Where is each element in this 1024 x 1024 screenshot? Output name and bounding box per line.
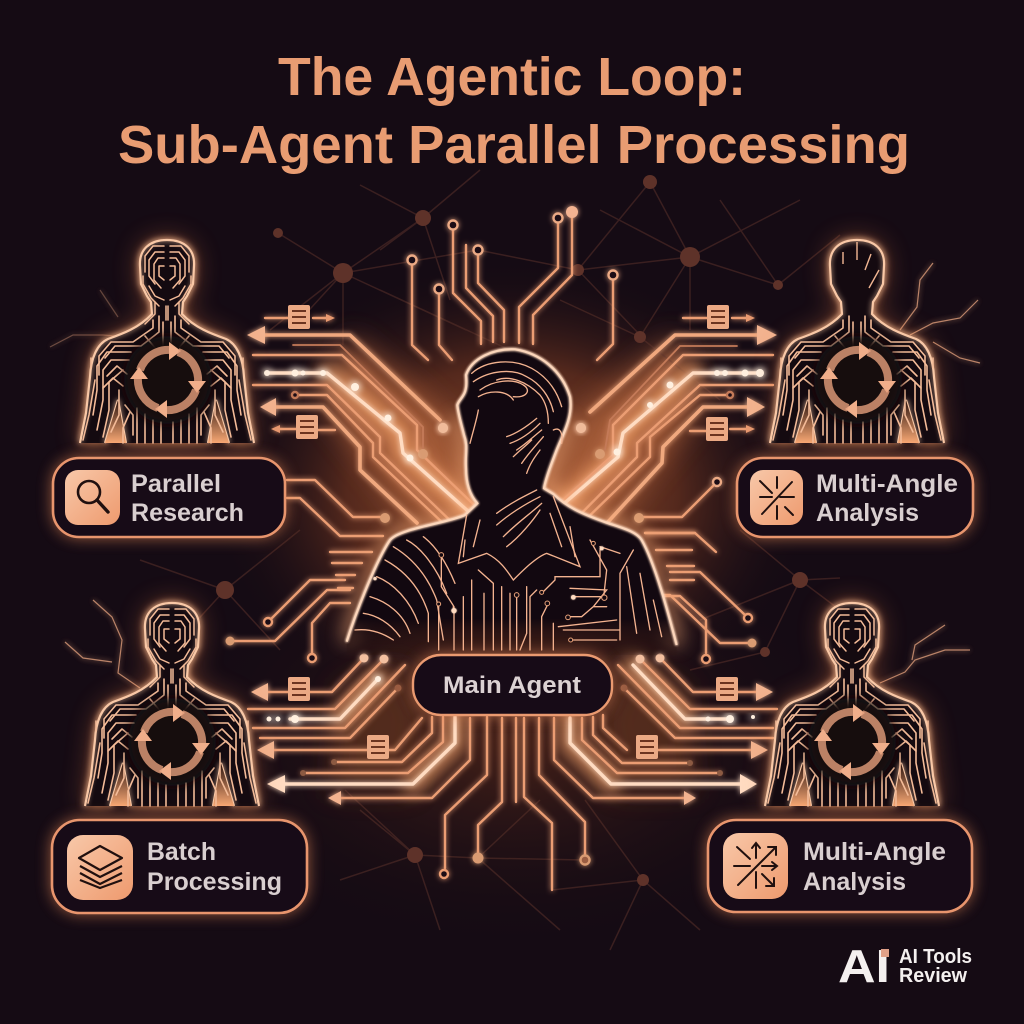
logo: AI Tools Review: Review: [899, 965, 967, 987]
mid side traces: [226, 533, 756, 663]
left upper circuit bundle: [247, 326, 500, 536]
sub-agent: bottom left: [85, 603, 259, 806]
label: parallel research: [131, 470, 244, 527]
document icon: mid left: [296, 415, 318, 439]
label: parallel research: Research: [131, 499, 244, 527]
panel: batch processing: [52, 820, 307, 913]
icon: converging arrows: [750, 470, 803, 525]
lower right circuit bundle: [516, 654, 777, 890]
label: multi-angle analysis bottom: [803, 838, 946, 896]
document icon: lower right 1: [716, 677, 738, 701]
panel: multi-angle analysis top: [737, 458, 973, 537]
label: batch processing: [147, 838, 282, 896]
title: The Agentic Loop:: [278, 47, 746, 107]
logo: AI Tools Review: [838, 940, 972, 992]
label: batch processing: Batch: [147, 838, 216, 866]
lower left glowing data dots: [266, 676, 381, 723]
document icon: lower left 1: [288, 677, 310, 701]
icon: stacked layers: [67, 835, 133, 900]
panel: main agent: [413, 655, 612, 715]
label: parallel research: Parallel: [131, 470, 221, 498]
title: Sub-Agent Parallel Processing: [118, 115, 910, 175]
label: multi-angle analysis top: Multi-Angle: [816, 470, 958, 498]
icon: diverging arrows: [723, 833, 788, 899]
network hubs: [216, 175, 808, 886]
panel: parallel research: [53, 458, 285, 537]
logo: AI Tools Review: AI: [838, 940, 890, 992]
label: main agent: Main Agent: [443, 672, 581, 699]
main agent circuit nodes: [438, 423, 586, 433]
document icon: lower right 2: [636, 735, 658, 759]
lower left circuit bundle: [248, 654, 502, 878]
top circuit traces: [408, 206, 618, 360]
logo: AI Tools Review: AI Tools: [899, 946, 972, 968]
document icon: lower left 2: [367, 735, 389, 759]
rotating loop icon: top left: [124, 336, 212, 424]
right glowing data dots: [614, 369, 764, 456]
sub-agent: top right: [770, 240, 944, 443]
bright streak glow: [327, 373, 693, 784]
document icon: mid right: [706, 417, 728, 441]
faint network: [140, 170, 880, 950]
document icon: top left: [288, 305, 310, 329]
label: multi-angle analysis top: [816, 470, 958, 527]
icon: magnifying glass: [65, 470, 120, 525]
lower right glowing data dots: [706, 715, 755, 723]
rotating loop icon: bottom left: [128, 698, 216, 786]
label: multi-angle analysis top: Analysis: [816, 499, 919, 527]
rotating loop icon: top right: [814, 336, 902, 424]
label: multi-angle analysis bottom: Analysis: [803, 868, 906, 896]
panel: multi-angle analysis bottom: [708, 820, 972, 912]
main agent silhouette: [347, 349, 677, 655]
background glow: [172, 260, 852, 950]
sub-agent: bottom right: [765, 603, 939, 806]
left glowing data dots: [264, 370, 414, 462]
document icon: top right: [707, 305, 729, 329]
rotating loop icon: bottom right: [808, 698, 896, 786]
right upper circuit bundle: [530, 325, 777, 552]
title: [118, 47, 910, 175]
label: multi-angle analysis bottom: Multi-Angle: [803, 838, 946, 866]
right upper data packets: [683, 314, 755, 433]
label: batch processing: Processing: [147, 868, 282, 896]
lightning bolts: [50, 263, 980, 688]
sub-agent: top left: [80, 240, 254, 443]
left upper data packets: [265, 314, 335, 433]
